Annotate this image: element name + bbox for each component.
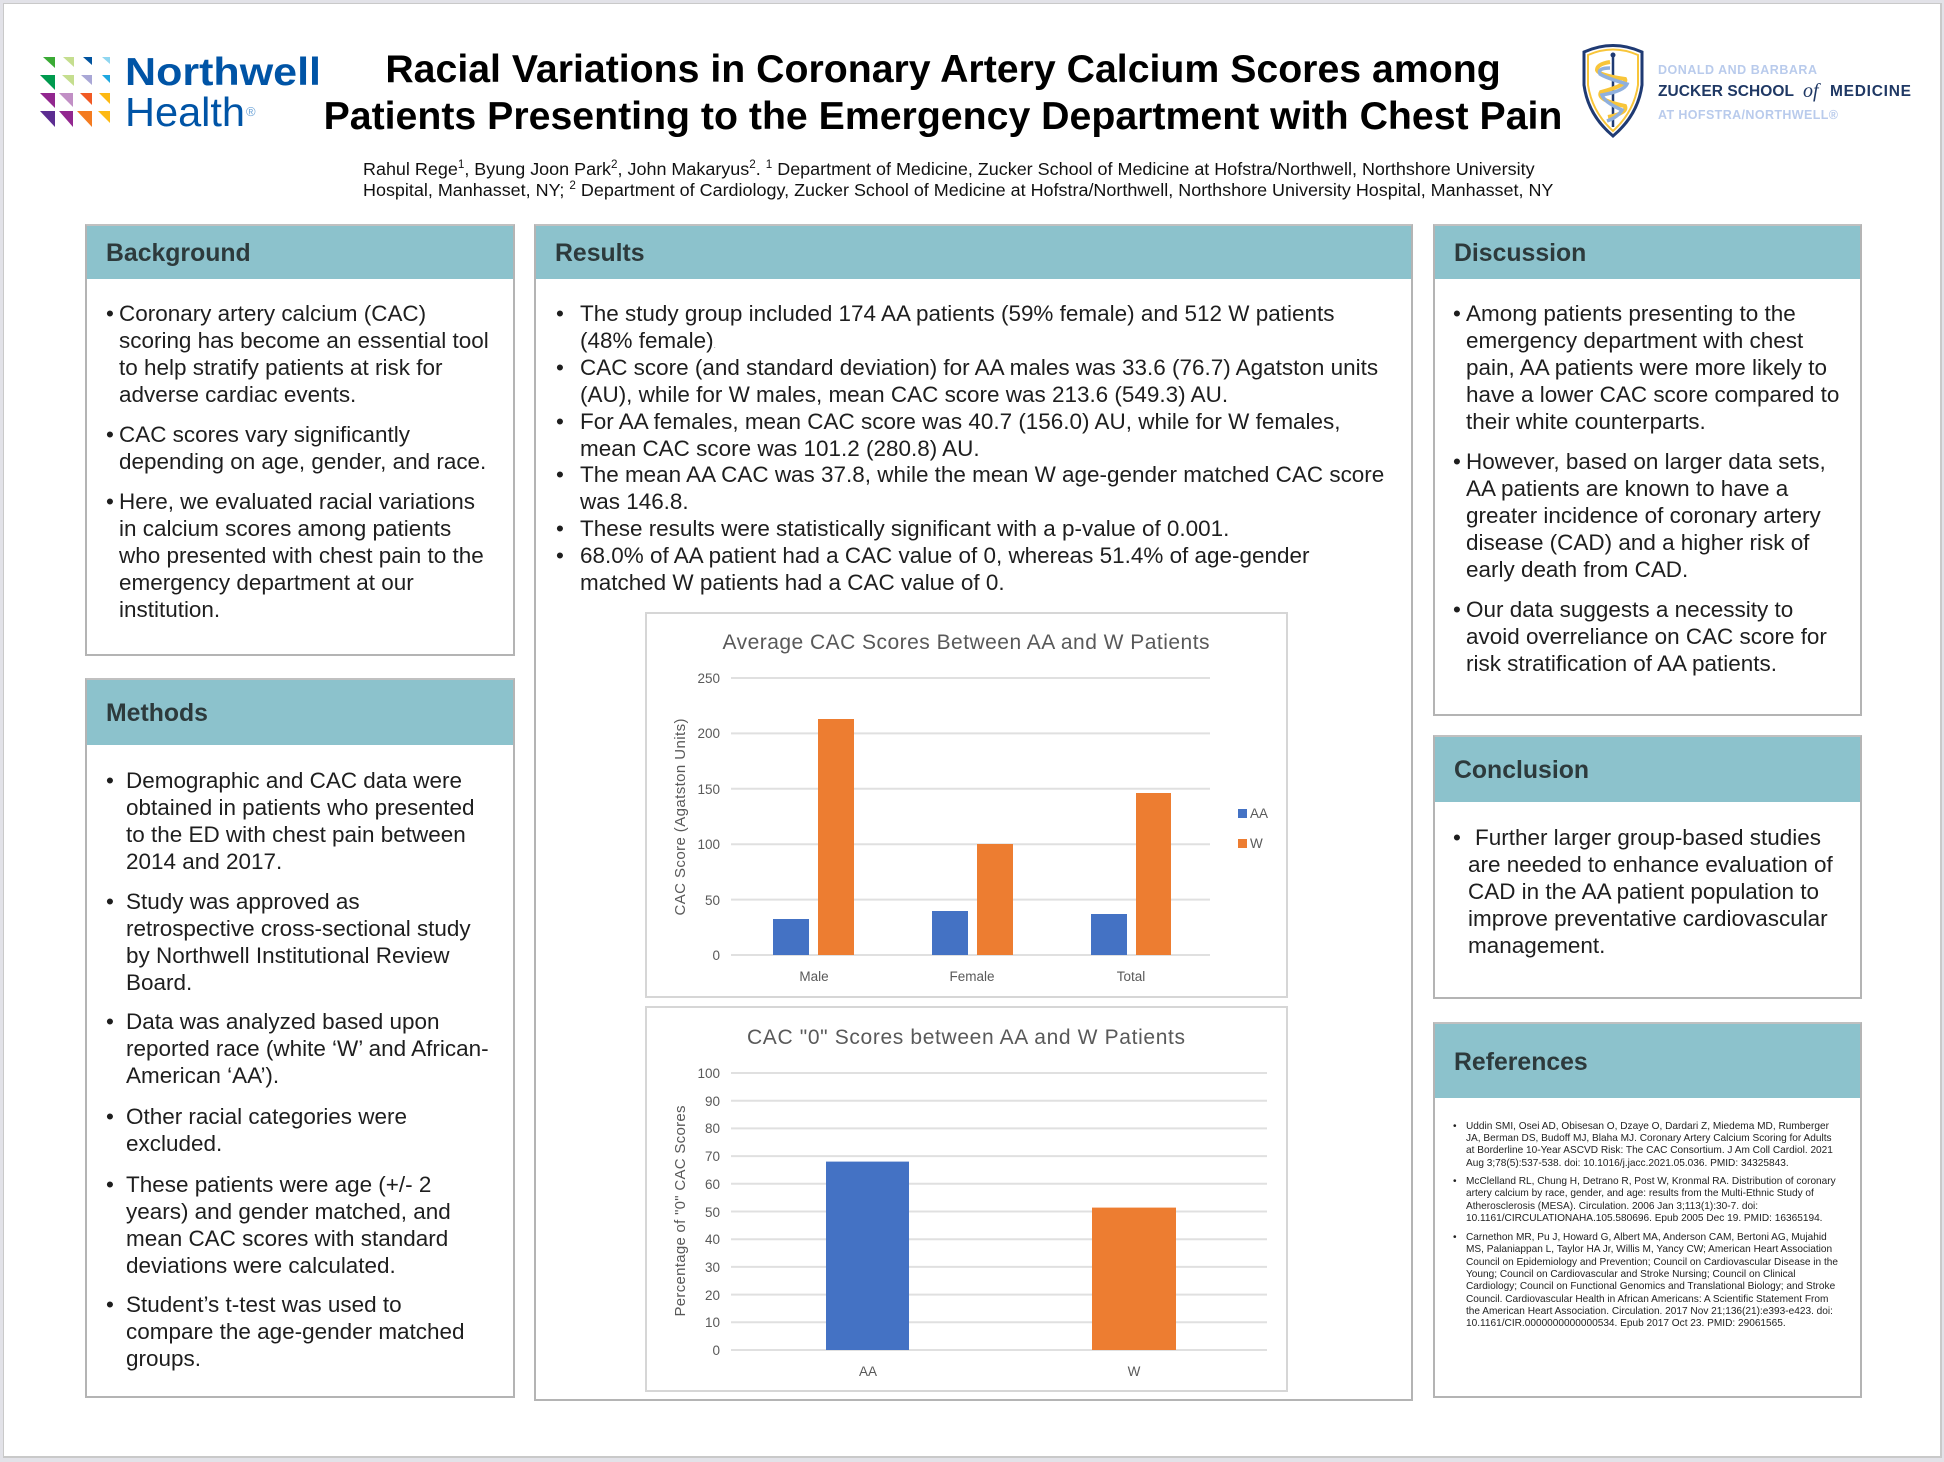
text: background points: Here, we evaluated racial variations [119,489,475,514]
text: background points: CAC scores vary significantly [119,422,410,447]
heading: background [87,226,513,279]
y axis labels: 90 [705,1094,720,1109]
x axis labels [859,1364,1141,1379]
heading: references: References [1454,1048,1588,1076]
chart title: Average CAC Scores Between AA and W Patients [722,631,1210,654]
text: methods points: American ‘AA’). [126,1063,279,1088]
text: results points: was 146.8. [580,489,689,514]
text: discussion points: AA patients are known to have a [1466,476,1788,501]
legend [1238,806,1268,851]
bars [826,1162,1176,1350]
bars [773,719,1171,955]
text: methods points: • [106,1172,114,1197]
logo wordmark [1658,63,1911,122]
panel: results [534,224,1413,1401]
y axis title: CAC Score (Agatston Units) [672,718,689,916]
legend: AA [1250,806,1268,821]
panel: results: • [556,516,564,541]
y axis labels: 20 [705,1288,720,1303]
y axis title: Percentage of "0" CAC Scores [672,1106,689,1316]
text: methods points: excluded. [126,1131,222,1156]
text: results points: (AU), while for W males, mean CAC score was 213.6 (549.3) AU. [580,382,1228,407]
text: methods points: • [106,1009,114,1034]
panel: results: • [556,462,564,487]
panel: results: • [556,355,564,380]
heading: results: Results [555,240,645,267]
text: background points: Coronary artery calcium (CAC) [119,301,426,326]
y axis labels: 0 [712,948,720,963]
text: background points: in calcium scores among patients [119,516,451,541]
text: results points: matched W patients had a CAC value of 0. [580,570,1005,595]
text: discussion points: have a lower CAC score compared to [1466,382,1839,407]
heading: methods [87,680,513,745]
authors: Rahul Rege1, Byung Joon Park2, John Makaryus2. 1 Department of Medicine, Zucker School of Medicine at Hofstra/Northwell, Northshore University [363,158,1535,179]
text: methods points: deviations were calculated. [126,1253,396,1278]
panel: results: • [556,543,564,568]
logo: Zucker School of Medicine [1582,44,1911,138]
heading: background: Background [106,240,251,267]
text: references list: • [1453,1120,1457,1132]
logo wordmark: Northwell [125,51,321,94]
text: discussion points: • [1453,301,1461,326]
text: references list: Uddin SMI, Osei AD, Obisesan O, Dzaye O, Dardari Z, Miedema MD, Rumberger [1466,1120,1829,1132]
text: results points: (48% female). [580,328,716,353]
text: methods points: mean CAC scores with standard [126,1226,448,1251]
text: references list: artery calcium by race, gender, and age: results from the Multi-Ethnic Study of [1466,1188,1814,1199]
text: background points: adverse cardiac events. [119,382,356,407]
title [324,46,1562,138]
text: discussion points: their white counterparts. [1466,409,1706,434]
text: results points: 68.0% of AA patient had a CAC value of 0, whereas 51.4% of age-gender [580,543,1309,568]
text: methods points: Study was approved as [126,889,360,914]
y axis labels [697,671,720,963]
x axis labels: Male [799,969,829,984]
text: discussion points: • [1453,449,1461,474]
text: discussion points: pain, AA patients were more likely to [1466,355,1827,380]
y axis labels: 100 [697,837,720,852]
authors [363,158,1553,200]
text: methods points: to the ED with chest pain between [126,822,466,847]
text: methods points: • [106,768,114,793]
text: methods points: 2014 and 2017. [126,849,282,874]
text: references list: Aug 3;78(5):537-538. doi: 10.1016/j.jacc.2021.05.036. PMID: 34325843. [1466,1158,1789,1169]
panel: results: • [556,301,564,326]
heading: references [1435,1024,1860,1098]
text: methods points: Board. [126,970,192,995]
y axis labels: 40 [705,1232,720,1247]
text: background points: scoring has become an essential tool [119,328,489,353]
y axis labels: 100 [697,1066,720,1081]
y axis labels: 250 [697,671,720,686]
y axis labels: 70 [705,1149,720,1164]
x axis labels: Female [949,969,995,984]
text: discussion points: early death from CAD. [1466,557,1688,582]
logo wordmark: of [1803,80,1821,102]
heading: methods: Methods [106,700,208,727]
text: references list: Cardiology; Council on Functional Genomics and Translational Biology; and Stroke [1466,1281,1835,1292]
heading: discussion [1435,226,1860,279]
logo wordmark: AT HOFSTRA/NORTHWELL® [1658,108,1839,122]
text: references list: Young; Council on Cardiovascular and Stroke Nursing; Council on Clinical [1466,1269,1796,1280]
text: results points [556,301,1384,595]
logo wordmark [125,51,321,135]
y axis labels: 50 [705,893,720,908]
y axis labels: 60 [705,1177,720,1192]
text: results points: The mean AA CAC was 37.8, while the mean W age-gender matched CAC score [580,462,1384,487]
x axis labels: W [1128,1364,1141,1379]
authors: Hospital, Manhasset, NY; 2 Department of Cardiology, Zucker School of Medicine at Hofstra/Northwell, Northshore University Hospital, Manhasset, NY [363,179,1553,200]
text: conclusion: management. [1468,933,1605,958]
text: background points: • [106,422,114,447]
x axis labels [799,969,1145,984]
text: references list: at Borderline 10-Year ASCVD Risk: The CAC Consortium. J Am Coll Cardiol. 2021 [1466,1145,1833,1156]
logo wordmark: ZUCKER SCHOOL [1658,83,1794,100]
text: methods points: Demographic and CAC data were [126,768,462,793]
logo wordmark: MEDICINE [1830,83,1911,100]
text: conclusion: improve preventative cardiovascular [1468,906,1828,931]
panel: conclusion [1433,735,1862,999]
y axis labels: 150 [697,782,720,797]
panel: methods [85,678,515,1398]
panel: discussion [1433,224,1862,716]
text: methods points: Data was analyzed based upon [126,1009,440,1034]
y axis labels: 80 [705,1121,720,1136]
text: background points [106,301,489,622]
y axis labels: 50 [705,1205,720,1220]
text: methods points: These patients were age (+/- 2 [126,1172,431,1197]
title: Racial Variations in Coronary Artery Calcium Scores among [385,46,1501,90]
logo wordmark: Health [125,89,245,135]
text: background points: • [106,489,114,514]
heading: conclusion: Conclusion [1454,757,1589,784]
text: methods points: compare the age-gender matched [126,1319,464,1344]
icon: triangle grid [40,57,110,127]
heading: conclusion [1435,737,1860,802]
text: methods points: retrospective cross-sectional study [126,916,471,941]
text: discussion points: greater incidence of coronary artery [1466,503,1821,528]
text: references list: Carnethon MR, Pu J, Howard G, Albert MA, Anderson CAM, Bertoni AG, Mujahid [1466,1232,1827,1243]
text: references list: 10.1161/CIR.0000000000000534. Epub 2017 Oct 23. PMID: 29061565. [1466,1318,1786,1329]
text: background points: • [106,301,114,326]
text: references list: Atherosclerosis (MESA). Circulation. 2006 Jan 3;113(1):30-7. doi: [1466,1201,1758,1212]
title: Patients Presenting to the Emergency Department with Chest Pain [324,94,1562,138]
text: results points: CAC score (and standard deviation) for AA males was 33.6 (76.7) Agatston units [580,355,1378,380]
heading: results [536,226,1411,279]
text: discussion points: However, based on larger data sets, [1466,449,1826,474]
heading: discussion: Discussion [1454,240,1586,267]
text: background points: depending on age, gender, and race. [119,449,486,474]
text: methods points: reported race (white ‘W’ and African- [126,1036,489,1061]
y axis labels: 0 [712,1343,720,1358]
text: discussion points [1453,301,1839,676]
text: references list: Council. Cardiovascular Health in African Americans: A Scientific Statement From [1466,1294,1828,1305]
text: methods points: by Northwell Institutional Review [126,943,449,968]
text: results points: mean CAC score was 101.2 (280.8) AU. [580,436,980,461]
text: references list: • [1453,1232,1457,1243]
panel: background [85,224,515,656]
y axis labels [697,1066,720,1358]
text: discussion points: avoid overreliance on CAC score for [1466,624,1827,649]
text: references list [1453,1120,1838,1329]
text: methods points: • [106,1104,114,1129]
text: results points: The study group included 174 AA patients (59% female) and 512 W patients [580,301,1334,326]
text: references list: • [1453,1176,1457,1187]
panel: conclusion: • [1453,825,1461,850]
text: methods points: years) and gender matched, and [126,1199,451,1224]
legend: W [1250,836,1263,851]
text: references list: McClelland RL, Chung H, Detrano R, Post W, Kronmal RA. Distribution of coronary [1466,1176,1836,1187]
text: methods points: Student’s t-test was used to [126,1292,402,1317]
text: methods points: • [106,889,114,914]
text: background points: institution. [119,597,220,622]
text: methods points [106,768,489,1371]
panel: results: • [556,409,564,434]
text: results points: These results were statistically significant with a p-value of 0.001. [580,516,1229,541]
logo wordmark: ® [246,104,256,119]
text: conclusion: Further larger group-based studies [1475,825,1821,850]
text: discussion points: Our data suggests a necessity to [1466,597,1793,622]
text: methods points: Other racial categories were [126,1104,407,1129]
y axis labels: 30 [705,1260,720,1275]
chart title: CAC "0" Scores between AA and W Patients [747,1026,1185,1049]
x axis labels: Total [1117,969,1145,984]
x axis labels: AA [859,1364,877,1379]
text: conclusion [1453,825,1833,958]
text: methods points: obtained in patients who presented [126,795,475,820]
text: discussion points: emergency department with chest [1466,328,1803,353]
text: discussion points: • [1453,597,1461,622]
text: references list: JA, Berman DS, Budoff MJ, Blaha MJ. Coronary Artery Calcium Scoring for Adults [1466,1133,1832,1144]
text: background points: who presented with chest pain to the [119,543,484,568]
text: references list: the American Heart Association. Circulation. 2017 Nov 21;136(21):e393-e423. doi: [1466,1306,1833,1317]
text: discussion points: Among patients presenting to the [1466,301,1796,326]
y axis labels: 10 [705,1315,720,1330]
y axis labels: 200 [697,726,720,741]
text: methods points: groups. [126,1346,201,1371]
text: background points: emergency department at our [119,570,414,595]
icon: shield with staff [1584,46,1642,136]
text: discussion points: risk stratification of AA patients. [1466,651,1777,676]
text: methods points: • [106,1292,114,1317]
text: references list: 10.1161/CIRCULATIONAHA.105.580696. Epub 2005 Dec 19. PMID: 16365194. [1466,1213,1822,1224]
text: conclusion: CAD in the AA patient population to [1468,879,1819,904]
text: results points: For AA females, mean CAC score was 40.7 (156.0) AU, while for W females, [580,409,1340,434]
logo wordmark: DONALD AND BARBARA [1658,63,1817,77]
text: background points: to help stratify patients at risk for [119,355,442,380]
logo: Northwell Health [40,51,321,135]
text: conclusion: are needed to enhance evaluation of [1468,852,1833,877]
panel: references [1433,1022,1862,1398]
text: discussion points: disease (CAD) and a higher risk of [1466,530,1809,555]
text: references list: MS, Palaniappan L, Taylor HA Jr, Willis M, Yancy CW; American Heart Association [1466,1244,1832,1255]
text: references list: Council on Epidemiology and Prevention; Council on Cardiovascular Disease in the [1466,1257,1838,1268]
